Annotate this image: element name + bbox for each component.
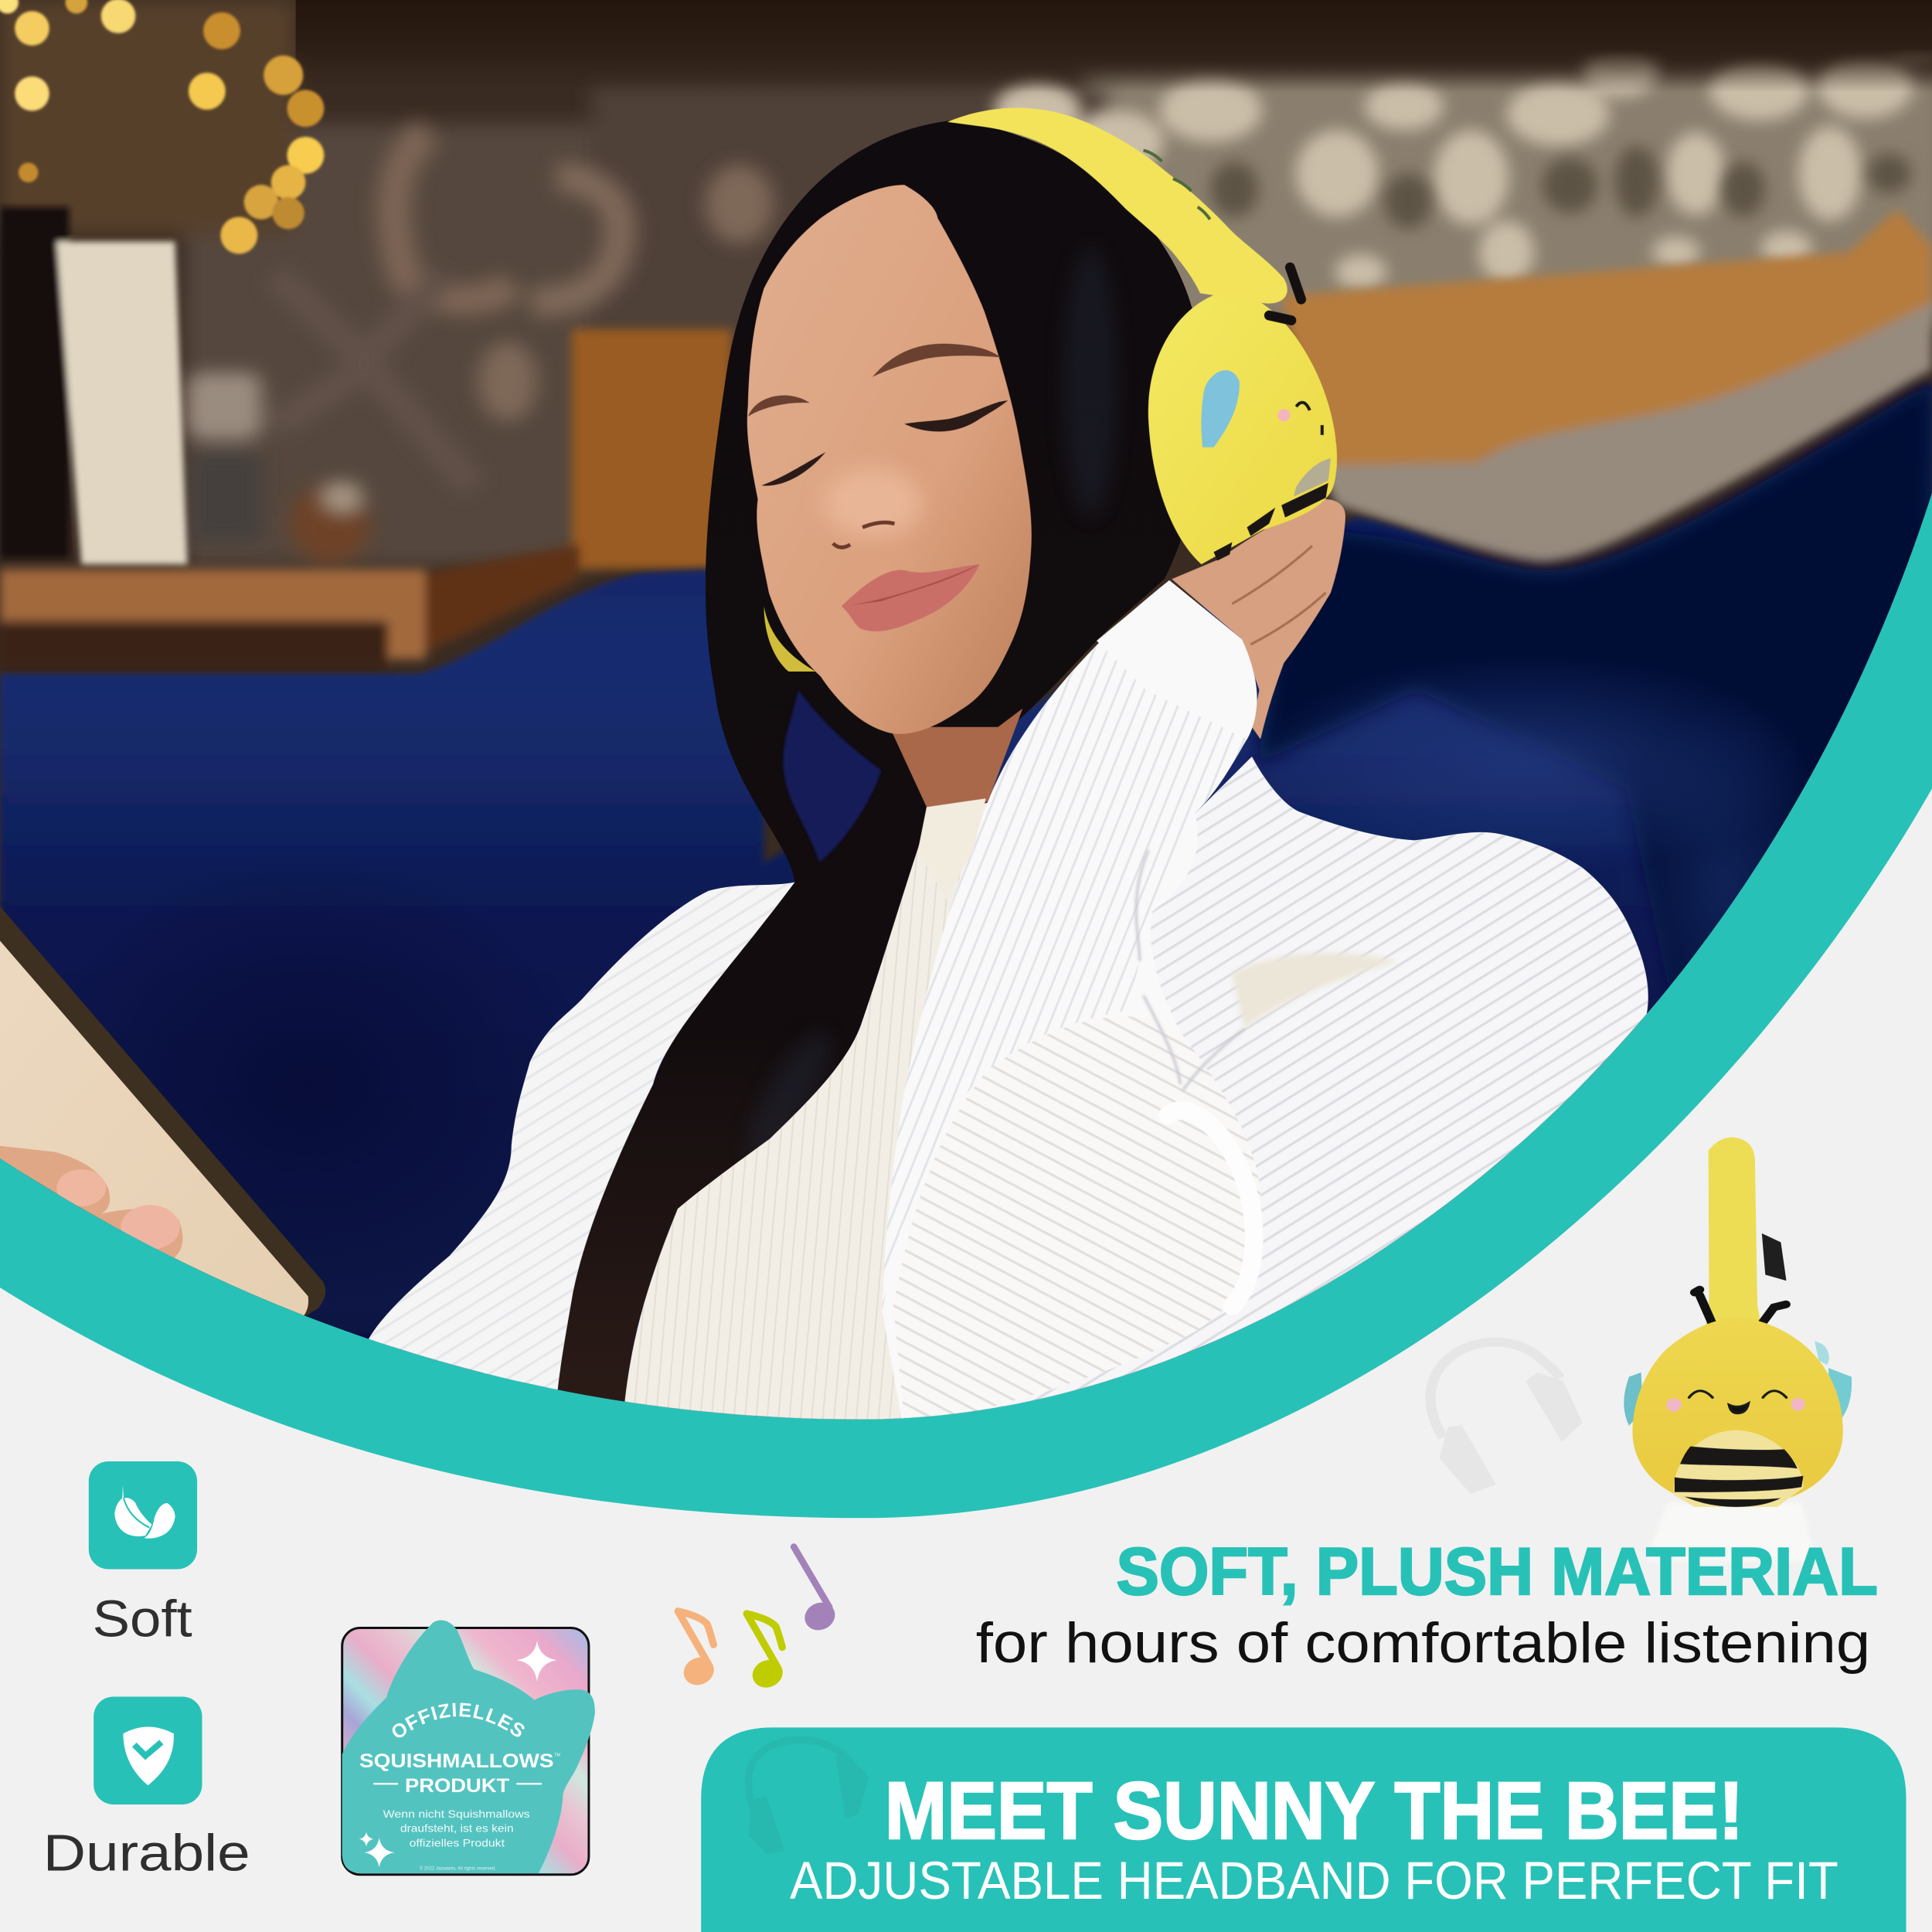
neck [889, 709, 1022, 811]
shelf table [0, 545, 579, 672]
official Squishmallows badge [341, 1620, 595, 1876]
purple note [794, 1547, 839, 1635]
bottom banner [701, 1727, 1906, 1932]
shirt cuff [1097, 580, 1257, 740]
lips [842, 564, 980, 631]
antennae [1269, 267, 1301, 321]
curved heading: OFFIZIELLES [393, 1703, 524, 1737]
left brow [748, 396, 810, 417]
badge disclaimer: offizielles Produkt [410, 1836, 505, 1849]
headband upright [1705, 1138, 1762, 1331]
lifestyle photo: woman listening with plush headphones [0, 0, 1932, 1420]
earmuff cup [1148, 267, 1337, 564]
sparkle large [516, 1641, 557, 1682]
headline: soft plush material: SOFT, PLUSH MATERIAL [1117, 1535, 1878, 1609]
hand holding tablet [0, 1146, 183, 1263]
right brow [872, 344, 1001, 377]
side blue ears [1624, 1342, 1852, 1426]
smile face [1689, 1391, 1787, 1413]
left closed eye [761, 452, 825, 486]
damask pattern right [985, 51, 1932, 292]
face [747, 185, 1032, 734]
headband of plush earmuffs [947, 108, 1287, 304]
care label [1762, 1233, 1787, 1281]
far-side yellow earmuff [764, 606, 815, 672]
sweater body and sleeves [363, 580, 1648, 1478]
turtleneck collar [918, 798, 986, 900]
banner subtitle: ADJUSTABLE HEADBAND FOR PERFECT FIT [790, 1851, 1838, 1910]
teal curved band [0, 0, 1932, 1518]
ghost headphones icon [1430, 1342, 1583, 1494]
nose [823, 468, 922, 547]
badge subtitle with rules: PRODUKT [405, 1775, 510, 1797]
soft reflection [1646, 1502, 1815, 1561]
dark column and white candle [0, 207, 187, 564]
banner title: MEET SUNNY THE BEE! [885, 1766, 1743, 1856]
right closed eye [904, 400, 1008, 431]
icon: feather tile [89, 1461, 197, 1569]
label: Soft: Soft [93, 1590, 192, 1648]
blue sofa [0, 376, 1932, 1420]
badge trademark: TM [554, 1753, 560, 1757]
icon: shield tile [94, 1696, 202, 1804]
cheek and eye [1296, 403, 1322, 435]
label: Durable: Durable [43, 1824, 250, 1882]
bokeh lights [0, 0, 324, 253]
orange wood panels and lace trim [572, 209, 1932, 570]
feature: Soft [89, 1461, 197, 1648]
cream belly [1294, 458, 1331, 497]
subheadline: comfortable listening: for hours of comfortable listening [976, 1611, 1870, 1675]
music notes [678, 1547, 839, 1692]
hair sheen [733, 247, 1117, 1172]
blurred room background [0, 0, 1932, 1232]
feather glyph [114, 1485, 175, 1539]
feature: Durable [43, 1696, 250, 1882]
blue sofa gap by neck [783, 690, 881, 862]
striped belly [1674, 1430, 1803, 1507]
green note [747, 1614, 787, 1692]
damask pattern left [187, 133, 774, 563]
badge disclaimer [383, 1808, 530, 1849]
headband embroidered logo marks [1144, 151, 1210, 219]
dark top band of the wall [296, 0, 1932, 93]
bee stripes on cup [1213, 483, 1328, 560]
orange note [678, 1611, 719, 1690]
badge disclaimer: Wenn nicht Squishmallows [383, 1808, 530, 1820]
teal cat silhouette [342, 1621, 595, 1873]
sparkles small [359, 1832, 395, 1867]
raised hand [1172, 499, 1345, 740]
holographic square [342, 1628, 589, 1875]
product photo: Sunny the bee plush earmuff [1624, 1138, 1852, 1561]
badge product name: SQUISHMALLOWS [359, 1750, 554, 1772]
hair [554, 121, 1202, 1411]
ghost headphones on banner [748, 1740, 869, 1855]
badge disclaimer: draufsteht, ist es kein [400, 1821, 514, 1834]
cheeks [1666, 1398, 1805, 1411]
badge copyright: © 2022 Jazwares. All rights reserved. [420, 1866, 496, 1871]
pink cheek [1277, 409, 1290, 421]
blue wing patch [1201, 370, 1240, 447]
tablet with edge [0, 892, 325, 1324]
plush body [1632, 1318, 1843, 1507]
finger creases [1232, 546, 1326, 645]
antennae [1695, 1290, 1786, 1324]
